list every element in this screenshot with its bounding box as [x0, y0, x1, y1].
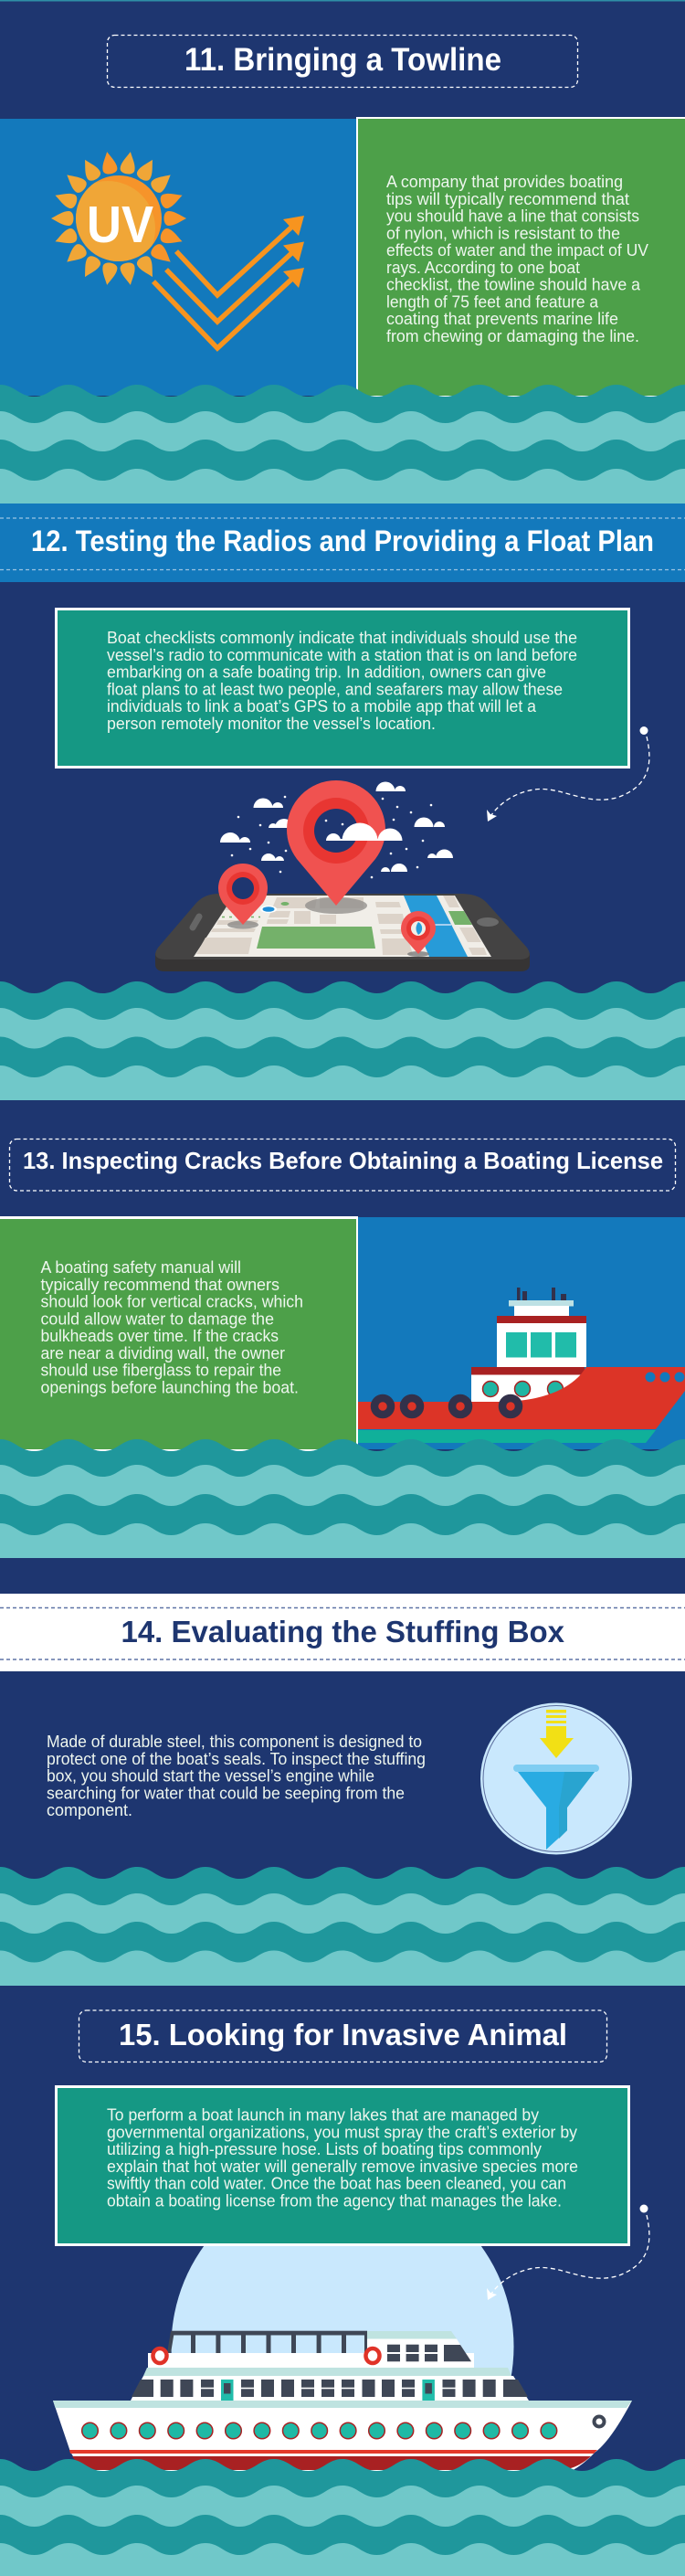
body text 12: Boat checklists commonly indicate that individuals should use the	[107, 628, 577, 647]
map screen	[194, 896, 491, 957]
section 12: testing the radios	[0, 504, 685, 1193]
body text 13: should use fiberglass to repair the	[40, 1360, 281, 1380]
icon: UV sun: UV	[87, 196, 153, 254]
body text 12: person remotely monitor the vessel’s location.	[107, 714, 436, 733]
illustration: passenger ship	[53, 2331, 632, 2475]
body text 15: utilizing a high-pressure hose. Lists of boating tips commonly	[107, 2139, 543, 2158]
body text 11: tips will typically recommend that	[386, 189, 629, 208]
heading band 14	[0, 1594, 685, 1671]
body text 14: searching for water that could be seeping from the	[47, 1783, 405, 1802]
body text 15: governmental organizations, you must spray the craft’s exterior by	[107, 2122, 578, 2141]
phone body	[155, 894, 530, 971]
panel: green text card 13	[0, 1216, 358, 1451]
body text 11: from chewing or damaging the line.	[386, 326, 639, 345]
ship middle deck	[131, 2368, 529, 2401]
body text 13: A boating safety manual will	[40, 1257, 241, 1277]
yellow arrow	[540, 1710, 574, 1758]
body text 12: individuals to link a boat’s GPS to a mobile app that will let a	[107, 696, 537, 716]
body text 11: of nylon, which is resistant to the	[386, 223, 620, 242]
heading 13	[9, 1139, 676, 1191]
panel: blue illustration background	[0, 119, 356, 396]
tug teal waterline	[358, 1430, 656, 1443]
body text 13: should look for vertical cracks, which	[40, 1292, 303, 1310]
icon: small map pin right	[401, 911, 436, 954]
body text 15: explain that hot water will generally remove invasive species more	[107, 2157, 578, 2176]
panel: green text card	[356, 117, 685, 398]
section 14: evaluating the stuffing box	[0, 1558, 685, 2078]
tug portholes on hull	[645, 1373, 685, 1382]
heading 15: 15. Looking for Invasive Animal	[119, 2019, 567, 2052]
section 13: inspecting cracks	[0, 1100, 685, 1651]
icon: large map pin	[287, 780, 402, 906]
funnel	[513, 1765, 599, 1850]
panel: teal text card 15	[57, 2087, 628, 2244]
ship hull	[53, 2401, 632, 2475]
clouds and stars behind pin	[220, 782, 453, 878]
icon: funnel in circle	[480, 1703, 632, 1855]
tug red hull	[358, 1367, 685, 1429]
waves 14	[0, 1867, 685, 2078]
section 11: bringing a towline	[0, 35, 685, 504]
waves 15	[0, 2459, 685, 2576]
tug tires	[374, 1398, 519, 1415]
icon: UV sun	[51, 151, 186, 286]
waves 11	[0, 385, 685, 597]
waves 12	[0, 981, 685, 1193]
body text 13: openings before launching the boat.	[40, 1377, 299, 1396]
body text 11: A company that provides boating	[386, 172, 623, 191]
heading 11: 11. Bringing a Towline	[184, 42, 501, 78]
body text 13	[40, 1257, 303, 1396]
body text 14: protect one of the boat’s seals. To inspect the stuffing	[47, 1749, 426, 1768]
ship railing	[167, 2331, 367, 2354]
body text 13: bulkheads over time. If the cracks	[40, 1326, 279, 1345]
body text 12	[107, 628, 577, 733]
body text 11: you should have a line that consists	[386, 207, 639, 225]
body text 12: embarking on a safe boating trip. In addition, owners can give	[107, 662, 546, 682]
body text 14: component.	[47, 1800, 132, 1819]
heading band 14: 14. Evaluating the Stuffing Box	[121, 1616, 564, 1649]
waves 13	[0, 1439, 685, 1651]
heading 13: 13. Inspecting Cracks Before Obtaining a Boating License	[23, 1147, 663, 1174]
ship portholes	[82, 2422, 557, 2439]
body text 11	[386, 172, 649, 345]
tug lower cabin	[471, 1367, 585, 1404]
body text 14: Made of durable steel, this component is designed to	[47, 1732, 422, 1751]
illustration: phone with map pins	[155, 780, 530, 971]
arrow: dashed callout 12	[487, 726, 649, 822]
panel: teal text card 12	[57, 609, 628, 768]
body text 14: box, you should start the vessel’s engine while	[47, 1765, 374, 1786]
body text 15: To perform a boat launch in many lakes that are managed by	[107, 2105, 540, 2124]
body text 13: are near a dividing wall, the owner	[40, 1343, 285, 1362]
body text 13: could allow water to damage the	[40, 1309, 274, 1328]
icon: small map pin left	[218, 864, 268, 925]
body text 15: obtain a boating license from the agency that manages the lake.	[107, 2190, 562, 2210]
icon: three rising arrows	[153, 216, 304, 348]
pale blue circle	[172, 2175, 513, 2518]
section 15: looking for invasive animal	[0, 1986, 685, 2576]
body text 15	[107, 2105, 578, 2210]
body text 11: checklist, the towline should have a	[386, 274, 641, 294]
body text 12: float plans to at least two people, and seafarers may allow these	[107, 679, 563, 698]
body text 11: effects of water and the impact of UV	[386, 240, 649, 260]
body text 11: coating that prevents marine life	[386, 309, 618, 328]
ship upper cabin	[148, 2331, 474, 2368]
body text 12: vessel’s radio to communicate with a station that is on land before	[107, 645, 577, 664]
panel: blue illustration background 13	[358, 1217, 685, 1449]
body text 14	[47, 1732, 426, 1819]
ship life rings	[153, 2348, 380, 2363]
arrow: dashed callout 15	[487, 2204, 649, 2300]
heading 11	[108, 35, 577, 88]
tug cabin upper	[497, 1288, 586, 1367]
body text 13: typically recommend that owners	[40, 1275, 279, 1294]
heading band 12	[0, 504, 685, 582]
body text 15: swiftly than cold water. Once the boat has been cleaned, you can	[107, 2173, 566, 2193]
illustration: tug boat	[358, 1288, 685, 1443]
ship anchor ring	[594, 2416, 605, 2427]
heading 15	[79, 2010, 606, 2062]
body text 11: length of 75 feet and feature a	[386, 292, 599, 311]
body text 11: rays. According to one boat	[386, 258, 580, 277]
